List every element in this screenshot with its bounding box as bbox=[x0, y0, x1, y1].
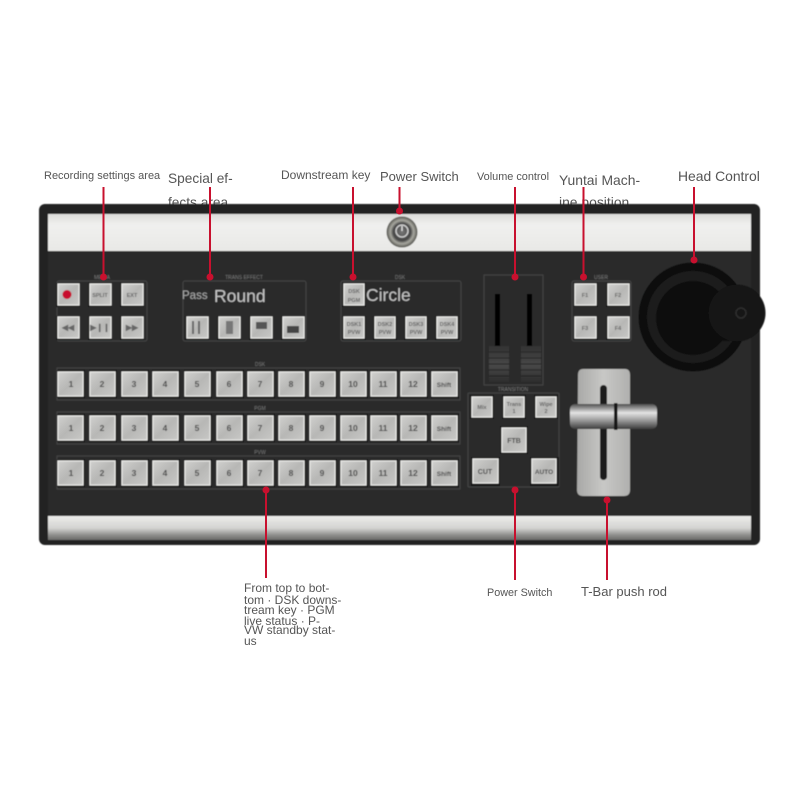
panel: transition: FTB bbox=[507, 438, 521, 445]
label: T-Bar push rod: T-Bar push rod bbox=[581, 584, 667, 599]
panel: PVW button row: 12 bbox=[408, 468, 418, 478]
callout line: downstream key bbox=[350, 187, 356, 280]
panel: DSK button row: 2 bbox=[100, 379, 105, 389]
label: row description: tream key · PGM bbox=[244, 603, 335, 617]
T-bar plate bbox=[577, 369, 630, 496]
panel: transition: CUT bbox=[478, 469, 493, 476]
panel: DSK button row: 9 bbox=[320, 379, 325, 389]
panel: DSK button row: 10 bbox=[348, 379, 358, 389]
label: Special effects area bbox=[168, 171, 233, 210]
label: Downstream key: Downstream key bbox=[281, 168, 370, 182]
panel: trans effect bbox=[182, 275, 306, 341]
text: Round: Round bbox=[214, 286, 266, 306]
label: Recording settings area: Recording settings area bbox=[44, 170, 161, 182]
panel: transition: 1 bbox=[512, 409, 516, 415]
panel: PVW button row: 2 bbox=[100, 468, 105, 478]
panel: PGM button row: 8 bbox=[289, 423, 294, 433]
callout line: head control bbox=[690, 187, 698, 264]
panel: transition: Mix bbox=[477, 405, 488, 411]
panel: DSK: DSK3 bbox=[409, 322, 423, 328]
label: Special effects area: fects area bbox=[168, 195, 228, 210]
panel: transition: Trans bbox=[507, 402, 521, 408]
panel: PGM button row bbox=[57, 406, 460, 444]
panel: media recording: ▶▶ bbox=[125, 323, 139, 332]
panel: DSK button row bbox=[57, 362, 460, 400]
panel: DSK button row: 7 bbox=[258, 379, 263, 389]
label: row description: us bbox=[244, 634, 257, 648]
label: Power Switch top: Power Switch bbox=[380, 169, 459, 184]
callout line: PVW row bbox=[262, 486, 270, 578]
panel: PGM button row: 4 bbox=[163, 423, 168, 433]
panel: PGM button row: 10 bbox=[348, 423, 358, 433]
panel: user position bbox=[572, 275, 631, 341]
panel: PVW button row: 4 bbox=[163, 468, 168, 478]
panel: PGM button row: Shift bbox=[437, 426, 452, 433]
panel: DSK button row: 6 bbox=[227, 379, 232, 389]
T-bar handle bbox=[570, 404, 657, 429]
panel: DSK button row: Shift bbox=[437, 382, 452, 389]
panel: media recording: ◀◀ bbox=[61, 323, 75, 332]
panel: DSK: DSK bbox=[348, 289, 360, 295]
panel: transition: AUTO bbox=[535, 469, 553, 476]
panel: DSK: PVW bbox=[379, 330, 392, 336]
panel: PGM button row: 2 bbox=[100, 423, 105, 433]
callout line: recording settings bbox=[100, 187, 107, 280]
label: Yuntai machine position bbox=[559, 172, 640, 210]
text: Pass: Pass bbox=[182, 290, 208, 302]
panel: PGM button row: 7 bbox=[258, 423, 263, 433]
panel: PGM button row: 1 bbox=[69, 423, 74, 433]
panel: DSK button row: 12 bbox=[408, 379, 418, 389]
panel: DSK: DSK1 bbox=[347, 322, 361, 328]
panel: DSK: PVW bbox=[410, 330, 423, 336]
panel: user position: F2 bbox=[615, 293, 621, 299]
panel: media recording: MEDIA bbox=[94, 275, 111, 281]
callout line: Yuntai position bbox=[580, 187, 587, 280]
control panel body bbox=[39, 204, 766, 545]
joystick head control bbox=[638, 262, 766, 372]
panel: DSK: PVW bbox=[348, 330, 361, 336]
callout line: special effects bbox=[206, 187, 214, 280]
panel: PVW button row: Shift bbox=[437, 471, 452, 478]
panel: user position: F3 bbox=[582, 326, 588, 332]
panel: DSK button row: 8 bbox=[289, 379, 294, 389]
label: Yuntai machine position: ine position bbox=[559, 194, 629, 210]
panel: DSK button row: 3 bbox=[132, 379, 137, 389]
panel: PVW button row: 9 bbox=[320, 468, 325, 478]
label: row description: From top to bot- bbox=[244, 581, 329, 595]
label: row description bbox=[244, 581, 341, 648]
bottom silver strip bbox=[48, 516, 751, 540]
panel: PVW button row: PVW bbox=[254, 450, 266, 456]
text: Circle: Circle bbox=[366, 285, 411, 305]
panel: PGM button row: 3 bbox=[132, 423, 137, 433]
panel: DSK button row: 5 bbox=[195, 379, 200, 389]
panel: user position: F4 bbox=[615, 326, 622, 332]
panel: DSK button row: 1 bbox=[69, 379, 74, 389]
panel: PGM button row: PGM bbox=[254, 406, 266, 412]
panel: volume faders bbox=[484, 275, 543, 385]
panel: media recording bbox=[56, 275, 147, 341]
panel: PGM button row: 12 bbox=[408, 423, 418, 433]
panel: media recording: SPLIT bbox=[92, 293, 108, 299]
panel: transition: Wipe bbox=[539, 402, 553, 408]
panel: PVW button row: 5 bbox=[195, 468, 200, 478]
label: row description: VW standby stat- bbox=[244, 623, 335, 637]
label: Yuntai machine position: Yuntai Mach- bbox=[559, 172, 640, 188]
panel: PVW button row bbox=[57, 450, 460, 489]
panel: PGM button row: 11 bbox=[378, 423, 388, 433]
callout line: power switch top bbox=[396, 187, 403, 214]
panel: DSK: DSK bbox=[395, 275, 406, 281]
panel: PVW button row: 6 bbox=[227, 468, 232, 478]
panel: transition: TRANSITION bbox=[498, 387, 529, 393]
panel: PVW button row: 7 bbox=[258, 468, 263, 478]
panel: PGM button row: 5 bbox=[195, 423, 200, 433]
label: Power Switch bottom: Power Switch bbox=[487, 587, 552, 599]
panel: transition bbox=[468, 387, 559, 487]
callout line: volume control bbox=[512, 187, 518, 280]
panel: PGM button row: 6 bbox=[227, 423, 232, 433]
panel: user position: USER bbox=[594, 275, 608, 281]
panel: user position: F1 bbox=[582, 293, 588, 299]
panel: PVW button row: 11 bbox=[378, 468, 388, 478]
panel: DSK: DSK4 bbox=[440, 322, 455, 328]
T-bar fader bbox=[570, 369, 657, 496]
top silver strip bbox=[48, 214, 751, 251]
panel: DSK: DSK2 bbox=[378, 322, 392, 328]
label: row description: live status · P- bbox=[244, 614, 320, 628]
icon: record bbox=[62, 290, 72, 299]
panel: DSK bbox=[341, 275, 461, 341]
panel: DSK button row: 4 bbox=[163, 379, 168, 389]
panel: PGM button row: 9 bbox=[320, 423, 325, 433]
panel: DSK: PGM bbox=[348, 298, 361, 304]
panel: PVW button row: 3 bbox=[132, 468, 137, 478]
panel: DSK: PVW bbox=[441, 330, 454, 336]
label: Special effects area: Special ef- bbox=[168, 171, 233, 186]
panel: PVW button row: 8 bbox=[289, 468, 294, 478]
label: Head Control: Head Control bbox=[678, 168, 760, 184]
label: Volume control: Volume control bbox=[477, 171, 549, 183]
panel: DSK button row: 11 bbox=[378, 379, 388, 389]
panel: trans effect: TRANS EFFECT bbox=[225, 275, 263, 281]
callout line: power switch bottom bbox=[512, 486, 518, 580]
callout line: T-bar bbox=[604, 496, 610, 580]
panel: transition: 2 bbox=[544, 409, 548, 415]
icon: power key switch bbox=[386, 216, 418, 248]
panel: media recording: ▶❙❙ bbox=[89, 323, 110, 333]
panel: media recording: EXT bbox=[127, 293, 138, 299]
panel: DSK button row: DSK bbox=[255, 362, 266, 368]
panel: PVW button row: 10 bbox=[348, 468, 358, 478]
label: row description: tom · DSK downs- bbox=[244, 593, 341, 607]
panel: PVW button row: 1 bbox=[69, 468, 74, 478]
